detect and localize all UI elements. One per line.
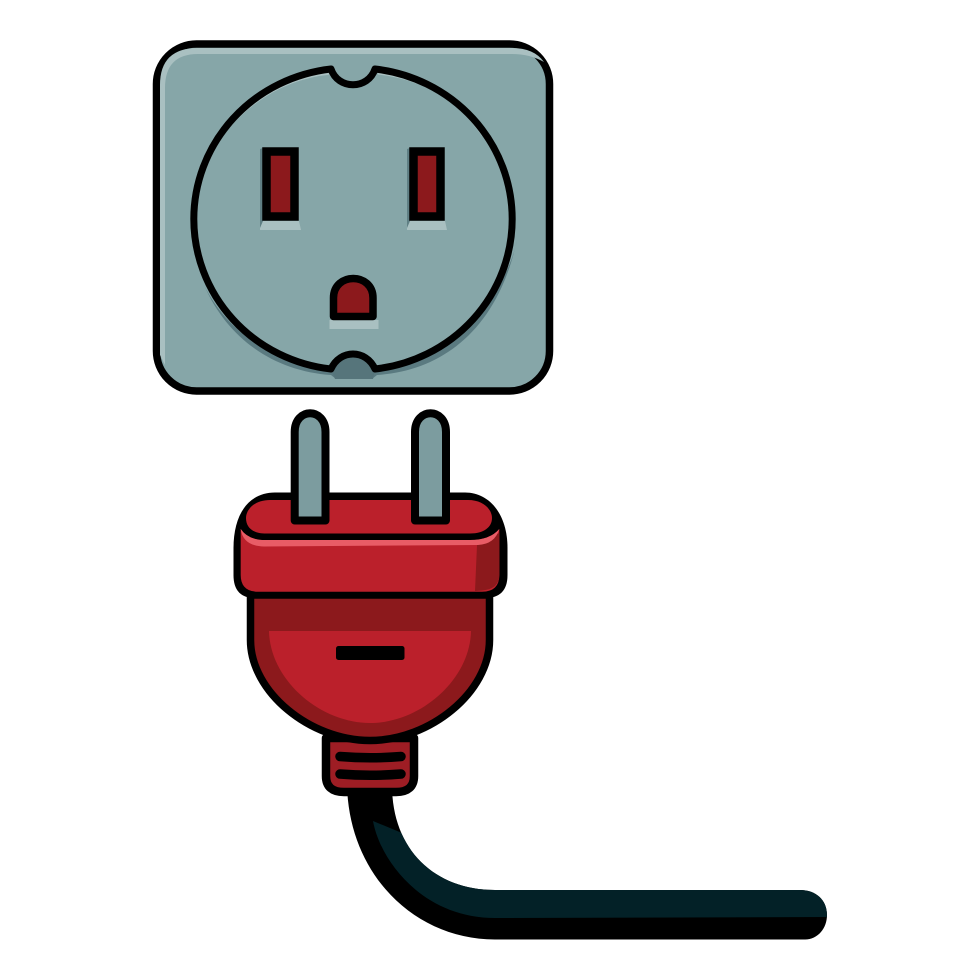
neck with grip ribs [326,738,414,792]
plug top cap [246,500,492,534]
right pin [415,413,446,520]
left pin [295,413,326,520]
electric plug [234,413,508,792]
right slot [407,148,447,230]
round socket face [194,69,517,379]
left slot [260,148,301,230]
power cable [347,785,835,940]
ground slot [330,278,378,329]
plug collar [241,529,499,592]
plug lower body [250,595,490,740]
socket plate [156,44,550,391]
wall socket [156,44,550,391]
plug head silhouette [234,492,508,598]
plug slot mark [336,646,404,660]
